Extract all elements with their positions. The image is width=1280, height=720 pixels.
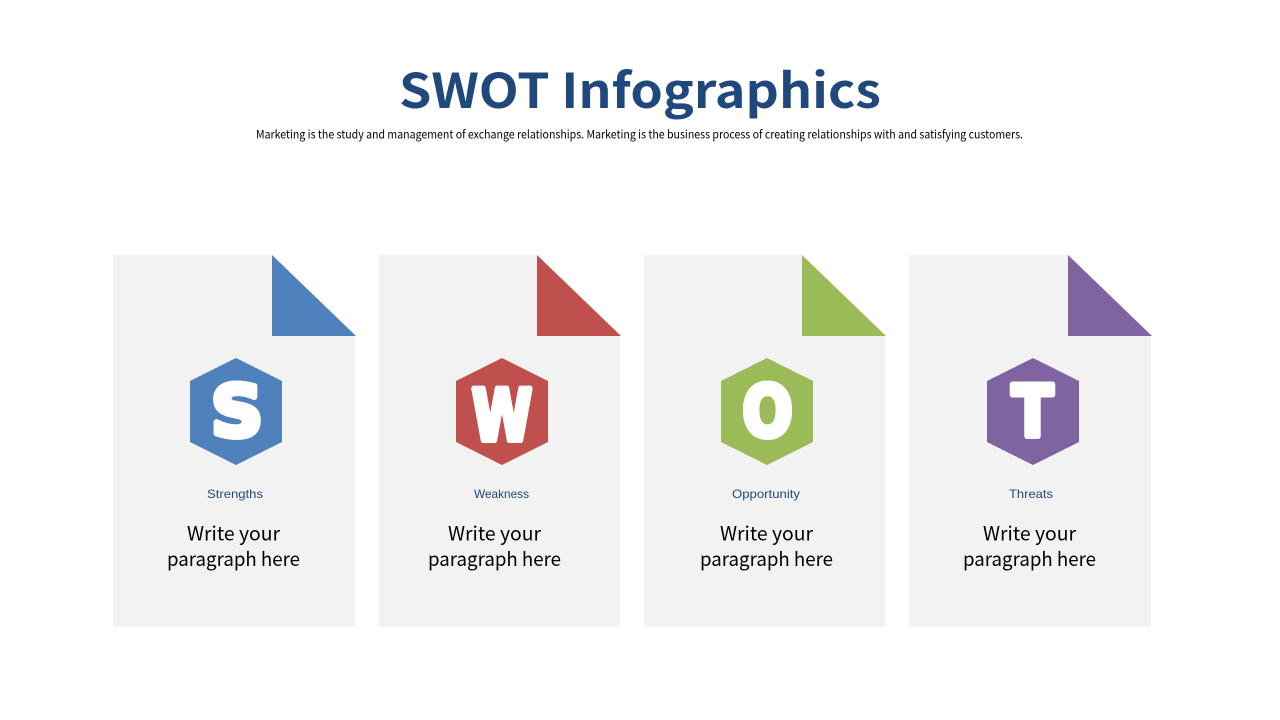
folded corner: opportunity	[802, 255, 886, 336]
paragraph: opportunity	[700, 518, 833, 572]
paragraph: weakness: paragraph here	[428, 543, 561, 572]
card background: threats	[909, 255, 1151, 627]
label: strengths: Strengths	[207, 487, 263, 501]
panel: strengths	[113, 255, 356, 627]
paragraph: threats: paragraph here	[963, 543, 1096, 572]
card background: opportunity	[644, 255, 885, 627]
card background: strengths	[113, 255, 355, 627]
label: opportunity: Opportunity	[732, 487, 800, 501]
paragraph: threats: Write your	[983, 518, 1076, 546]
panel: opportunity	[644, 255, 886, 627]
title: SWOT Infographics	[399, 52, 881, 122]
hexagon icon: O: O	[742, 371, 792, 453]
subtitle text: Marketing is the study and management of exchange relationships. Marketing is the business process of creating relationships with and satisfying customers.	[256, 126, 1023, 142]
hexagon icon: T	[987, 358, 1079, 465]
panel: weakness	[379, 255, 621, 627]
paragraph: strengths: Write your	[187, 518, 280, 546]
hexagon icon: O	[721, 358, 813, 465]
folded corner: weakness	[537, 255, 621, 336]
folded corner: strengths	[272, 255, 356, 336]
folded corner: threats	[1068, 255, 1152, 336]
paragraph: opportunity: paragraph here	[700, 543, 833, 572]
hexagon icon: S	[190, 358, 282, 465]
paragraph: opportunity: Write your	[720, 518, 813, 546]
paragraph: strengths	[167, 518, 300, 572]
paragraph: weakness	[428, 518, 561, 572]
hexagon icon: T: T	[1012, 371, 1053, 453]
hexagon icon: W	[456, 358, 548, 465]
label: weakness: Weakness	[474, 487, 529, 501]
paragraph: strengths: paragraph here	[167, 543, 300, 572]
paragraph: weakness: Write your	[448, 518, 541, 546]
paragraph: threats	[963, 518, 1096, 572]
card background: weakness	[379, 255, 620, 627]
hexagon icon: S: S	[211, 371, 263, 453]
label: threats: Threats	[1009, 487, 1053, 501]
hexagon icon: W: W	[472, 375, 532, 457]
panel: threats	[909, 255, 1152, 627]
